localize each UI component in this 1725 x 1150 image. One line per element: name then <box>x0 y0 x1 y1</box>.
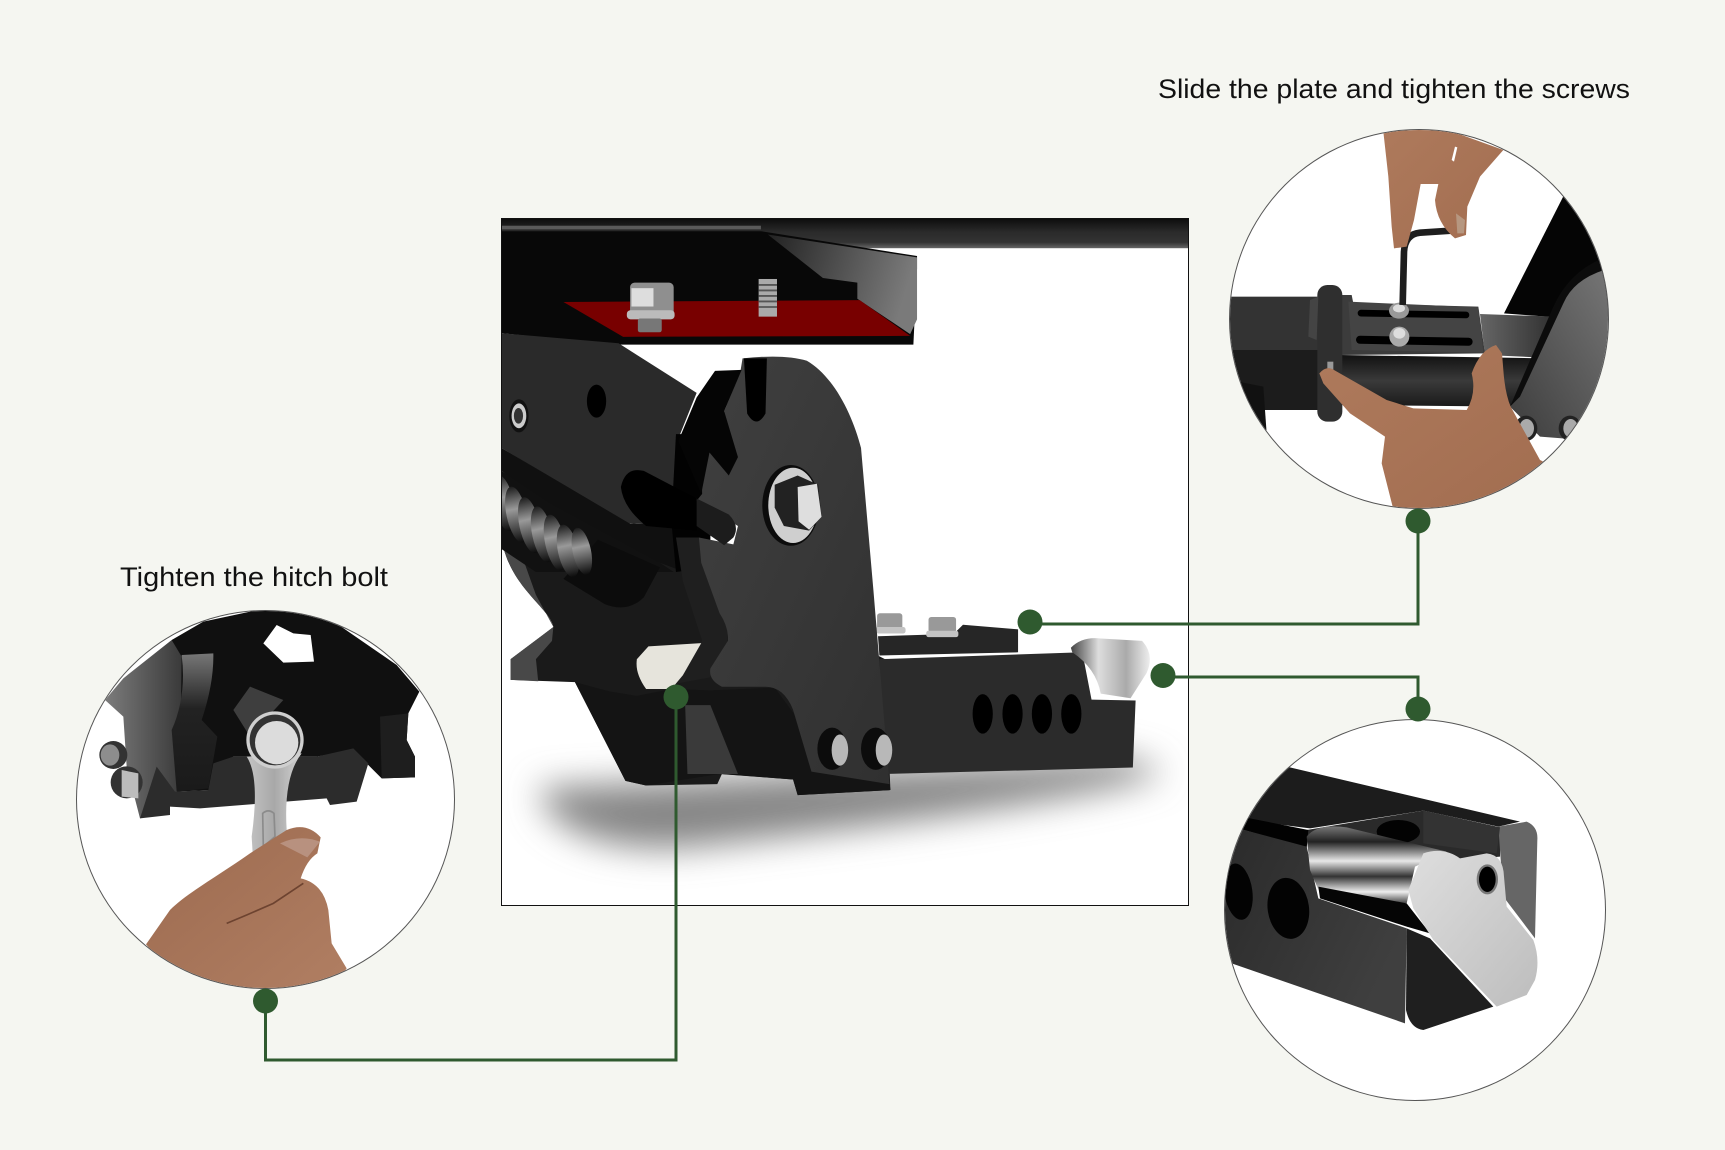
angled arm <box>501 333 697 524</box>
panel: latch close-up inset <box>1225 720 1605 1100</box>
tube hole row <box>973 694 1081 734</box>
thumbnail <box>1456 213 1465 233</box>
slide plate <box>1340 295 1485 355</box>
front flange <box>671 538 728 684</box>
left flange <box>172 653 217 792</box>
right tube <box>1480 314 1557 357</box>
arm underside <box>501 448 678 570</box>
spring backing <box>501 471 674 572</box>
ground shadow <box>541 758 1165 848</box>
housing wedge <box>768 234 917 334</box>
white pin <box>637 643 701 689</box>
connector: bolt to inset <box>253 684 688 1060</box>
top rail <box>501 218 1188 248</box>
latch plate <box>1408 851 1537 1007</box>
black main body <box>172 607 419 792</box>
lower bracket <box>504 531 890 795</box>
wrench <box>246 711 304 853</box>
bracket edge highlight <box>504 549 553 681</box>
plate screws <box>876 613 958 637</box>
socket shaft <box>233 687 283 737</box>
nut and stud <box>627 279 777 332</box>
rear clamp <box>1230 380 1267 433</box>
chrome latch <box>1071 638 1150 698</box>
latch shadow <box>1318 887 1430 933</box>
side face <box>1220 828 1407 1023</box>
recess base <box>1307 811 1500 863</box>
main bolt <box>762 465 822 546</box>
hand <box>146 827 347 997</box>
top face <box>1243 767 1520 828</box>
lower body <box>140 748 368 818</box>
gray bracket <box>1510 268 1613 440</box>
plate tab <box>697 498 736 545</box>
spring <box>488 473 596 579</box>
black upright <box>1504 195 1610 317</box>
gray side plate <box>105 640 182 818</box>
large side plate <box>697 357 889 784</box>
tube underside <box>1340 355 1543 407</box>
tube holes <box>1221 862 1313 942</box>
finger crease <box>227 883 303 923</box>
rail highlight <box>501 226 761 229</box>
connector: plate to inset <box>1018 508 1430 634</box>
finger gap <box>1452 147 1457 162</box>
allen key <box>1403 231 1451 305</box>
chrome roller <box>1307 826 1447 903</box>
receiver tube <box>879 652 1136 774</box>
lock nuts <box>99 741 143 798</box>
panel: main product photo <box>502 219 1188 905</box>
top plate slot <box>744 358 767 422</box>
red adhesive pad <box>563 300 910 337</box>
right flange <box>380 713 415 778</box>
lower bolts <box>817 728 892 770</box>
lower hand <box>1319 345 1547 511</box>
lower clamp face <box>685 705 738 774</box>
panel: hitch bolt inset <box>77 611 454 988</box>
plate screws <box>1389 303 1409 347</box>
left tube <box>1223 297 1323 410</box>
pin and knob <box>1308 285 1342 422</box>
plate black edge <box>678 370 742 494</box>
recess <box>1423 811 1500 853</box>
sliding plate <box>878 625 1018 656</box>
cylinder <box>563 540 660 607</box>
recess hole <box>1377 820 1420 843</box>
lower clamp <box>575 682 890 795</box>
arm socket screw <box>509 399 529 432</box>
glossy edge <box>1238 817 1308 848</box>
connector: latch to inset <box>1150 663 1430 722</box>
rear end <box>1498 822 1537 938</box>
heading: slide the plate: Slide the plate and tighten the screws <box>1158 74 1630 104</box>
thumbnail <box>280 838 320 857</box>
arm slot <box>621 470 697 531</box>
heading: tighten the hitch bolt: Tighten the hitch bolt <box>120 562 389 592</box>
arm hole <box>587 385 606 418</box>
upper housing <box>501 231 917 345</box>
panel: slide plate inset <box>1230 130 1608 508</box>
upper hand <box>1383 128 1503 248</box>
plate black backing <box>671 434 710 572</box>
end face <box>1406 928 1493 1030</box>
bracket edge <box>1510 259 1604 407</box>
bracket nuts <box>1515 416 1581 441</box>
star cutout <box>263 625 314 663</box>
